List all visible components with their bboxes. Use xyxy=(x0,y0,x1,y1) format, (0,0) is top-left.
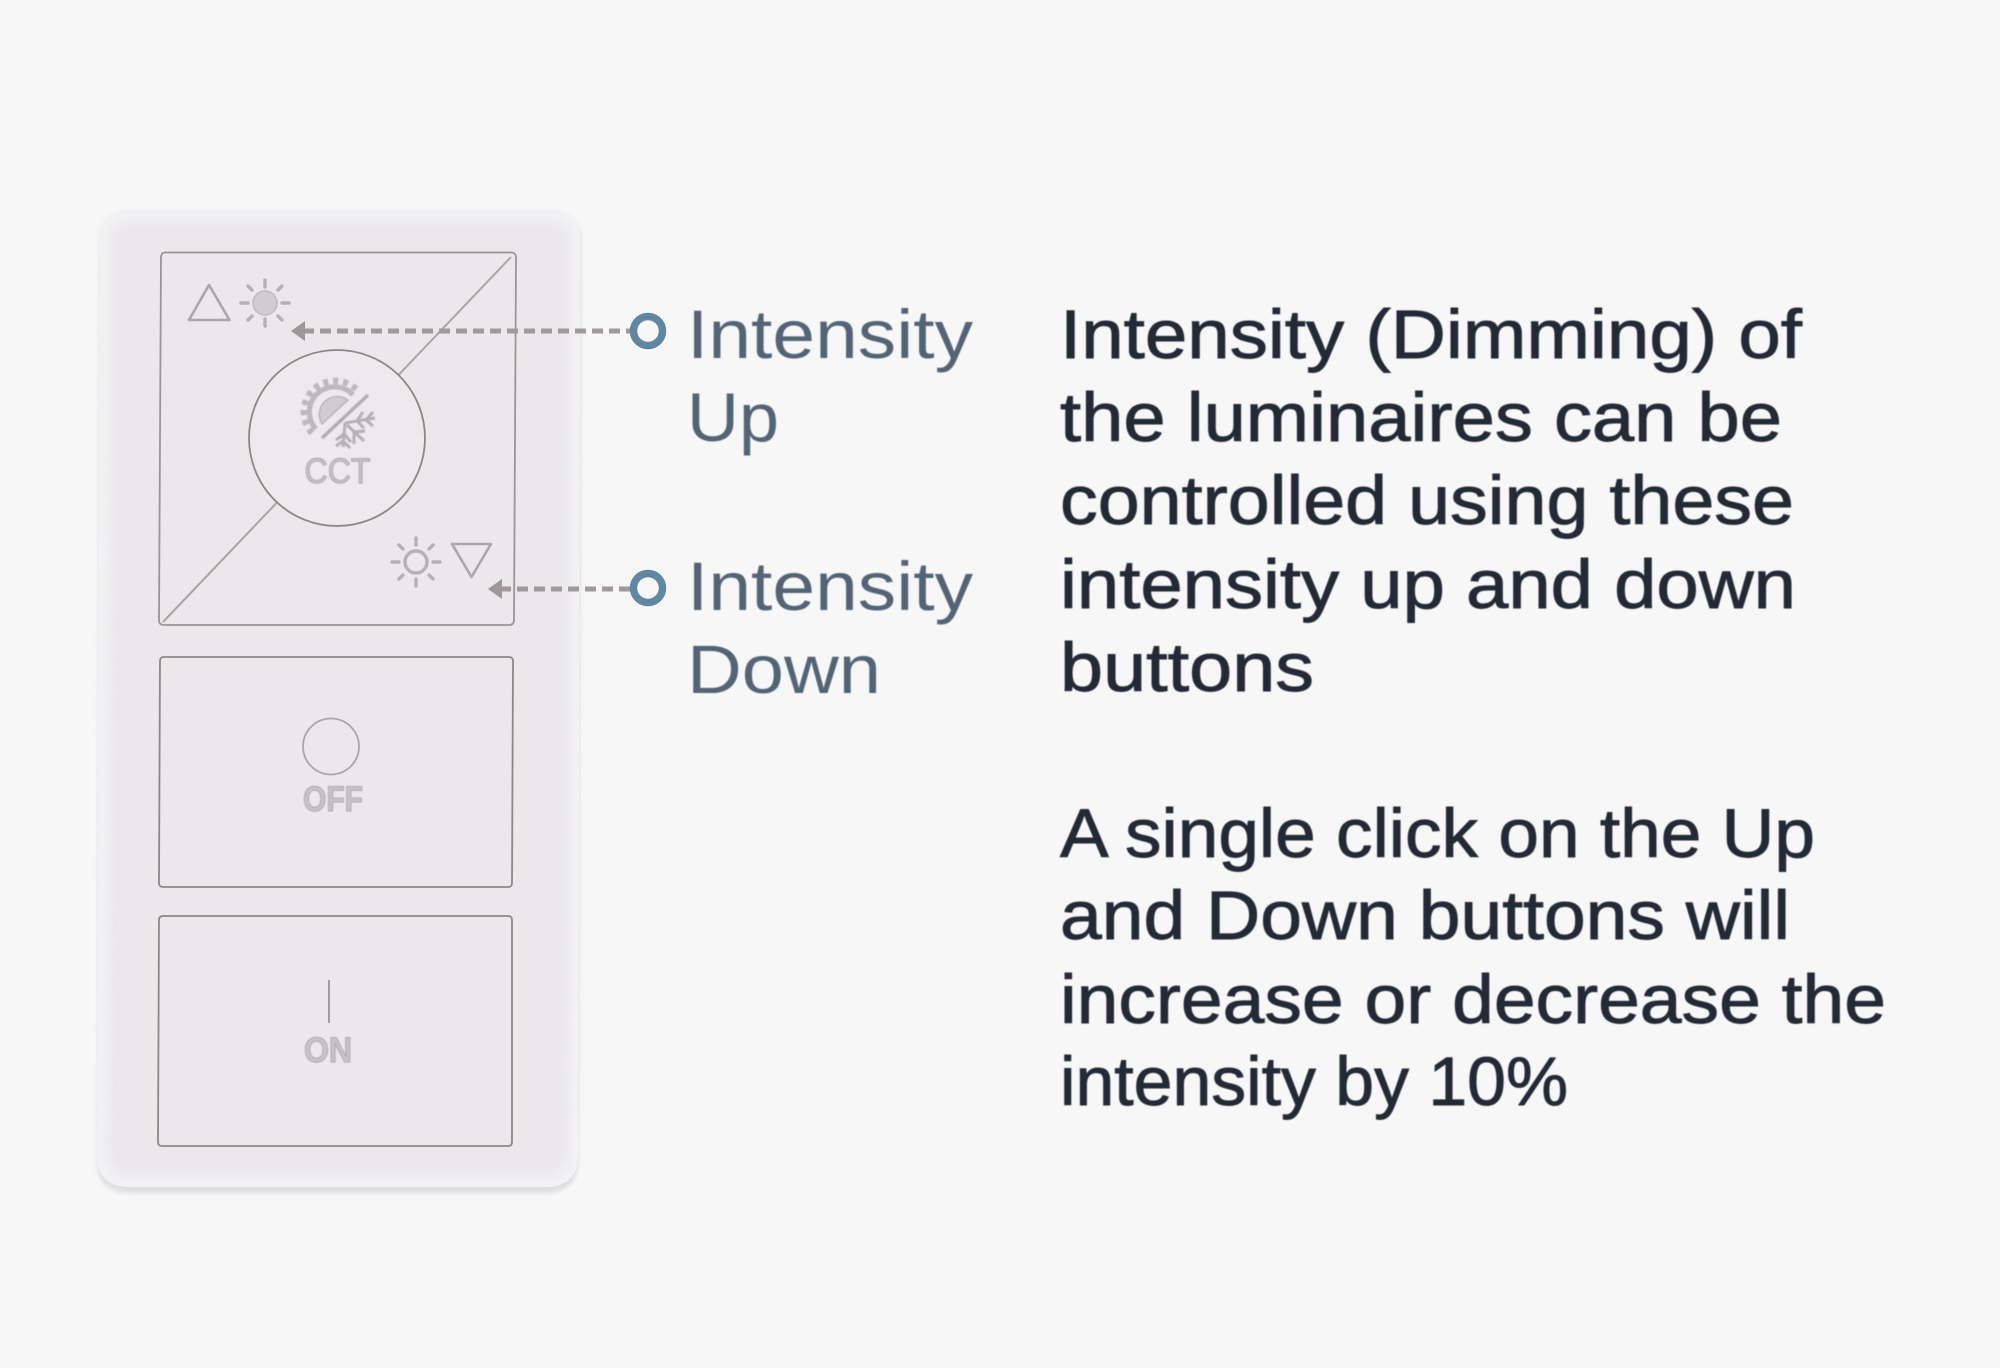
text block: single click behaviour: intensity by 10% xyxy=(1060,1043,1568,1120)
icon: hollow sun xyxy=(392,538,440,586)
label: Intensity Down: Intensity xyxy=(687,548,974,625)
text block: single click behaviour: and Down buttons will xyxy=(1060,877,1790,954)
icon: off circle xyxy=(303,718,359,774)
text block: single click behaviour: A single click on the Up xyxy=(1060,795,1815,872)
text block: intensity description: Intensity (Dimming) of xyxy=(1060,296,1803,373)
label: Intensity Down: Down xyxy=(687,631,881,708)
label: Intensity Up: Intensity xyxy=(687,296,974,373)
panel: intensity rocker button xyxy=(159,252,516,625)
icon: up triangle xyxy=(189,285,230,320)
label: Intensity Down xyxy=(687,548,974,708)
icon: down triangle xyxy=(452,544,491,577)
text block: intensity description: buttons xyxy=(1060,629,1314,706)
label: Intensity Up: Up xyxy=(687,379,779,456)
marker ring: intensity up xyxy=(634,316,662,346)
text block: intensity description: controlled using these xyxy=(1060,462,1794,539)
icon: filled sun xyxy=(241,280,289,326)
marker ring: intensity down xyxy=(634,574,662,602)
arrow: intensity up pointer xyxy=(291,321,632,341)
button label: CCT: CCT xyxy=(304,452,370,491)
text block: intensity description: the luminaires can be xyxy=(1060,379,1782,456)
OFF button xyxy=(159,657,513,887)
label: Intensity Up xyxy=(687,296,974,456)
text block: intensity description xyxy=(1060,296,1803,706)
text block: single click behaviour xyxy=(1060,795,1886,1120)
remote control wall switch xyxy=(97,209,581,1193)
icon: on line xyxy=(328,980,330,1023)
button label: OFF: OFF xyxy=(303,780,363,819)
CCT button xyxy=(249,350,425,526)
button label: ON: ON xyxy=(304,1031,352,1070)
text block: intensity description: intensity up and down xyxy=(1060,546,1796,623)
icon: half sun gear and snowflake xyxy=(304,381,375,448)
text block: single click behaviour: increase or decrease the xyxy=(1060,961,1886,1038)
ON button xyxy=(158,916,512,1146)
arrow: intensity down pointer xyxy=(488,579,632,599)
